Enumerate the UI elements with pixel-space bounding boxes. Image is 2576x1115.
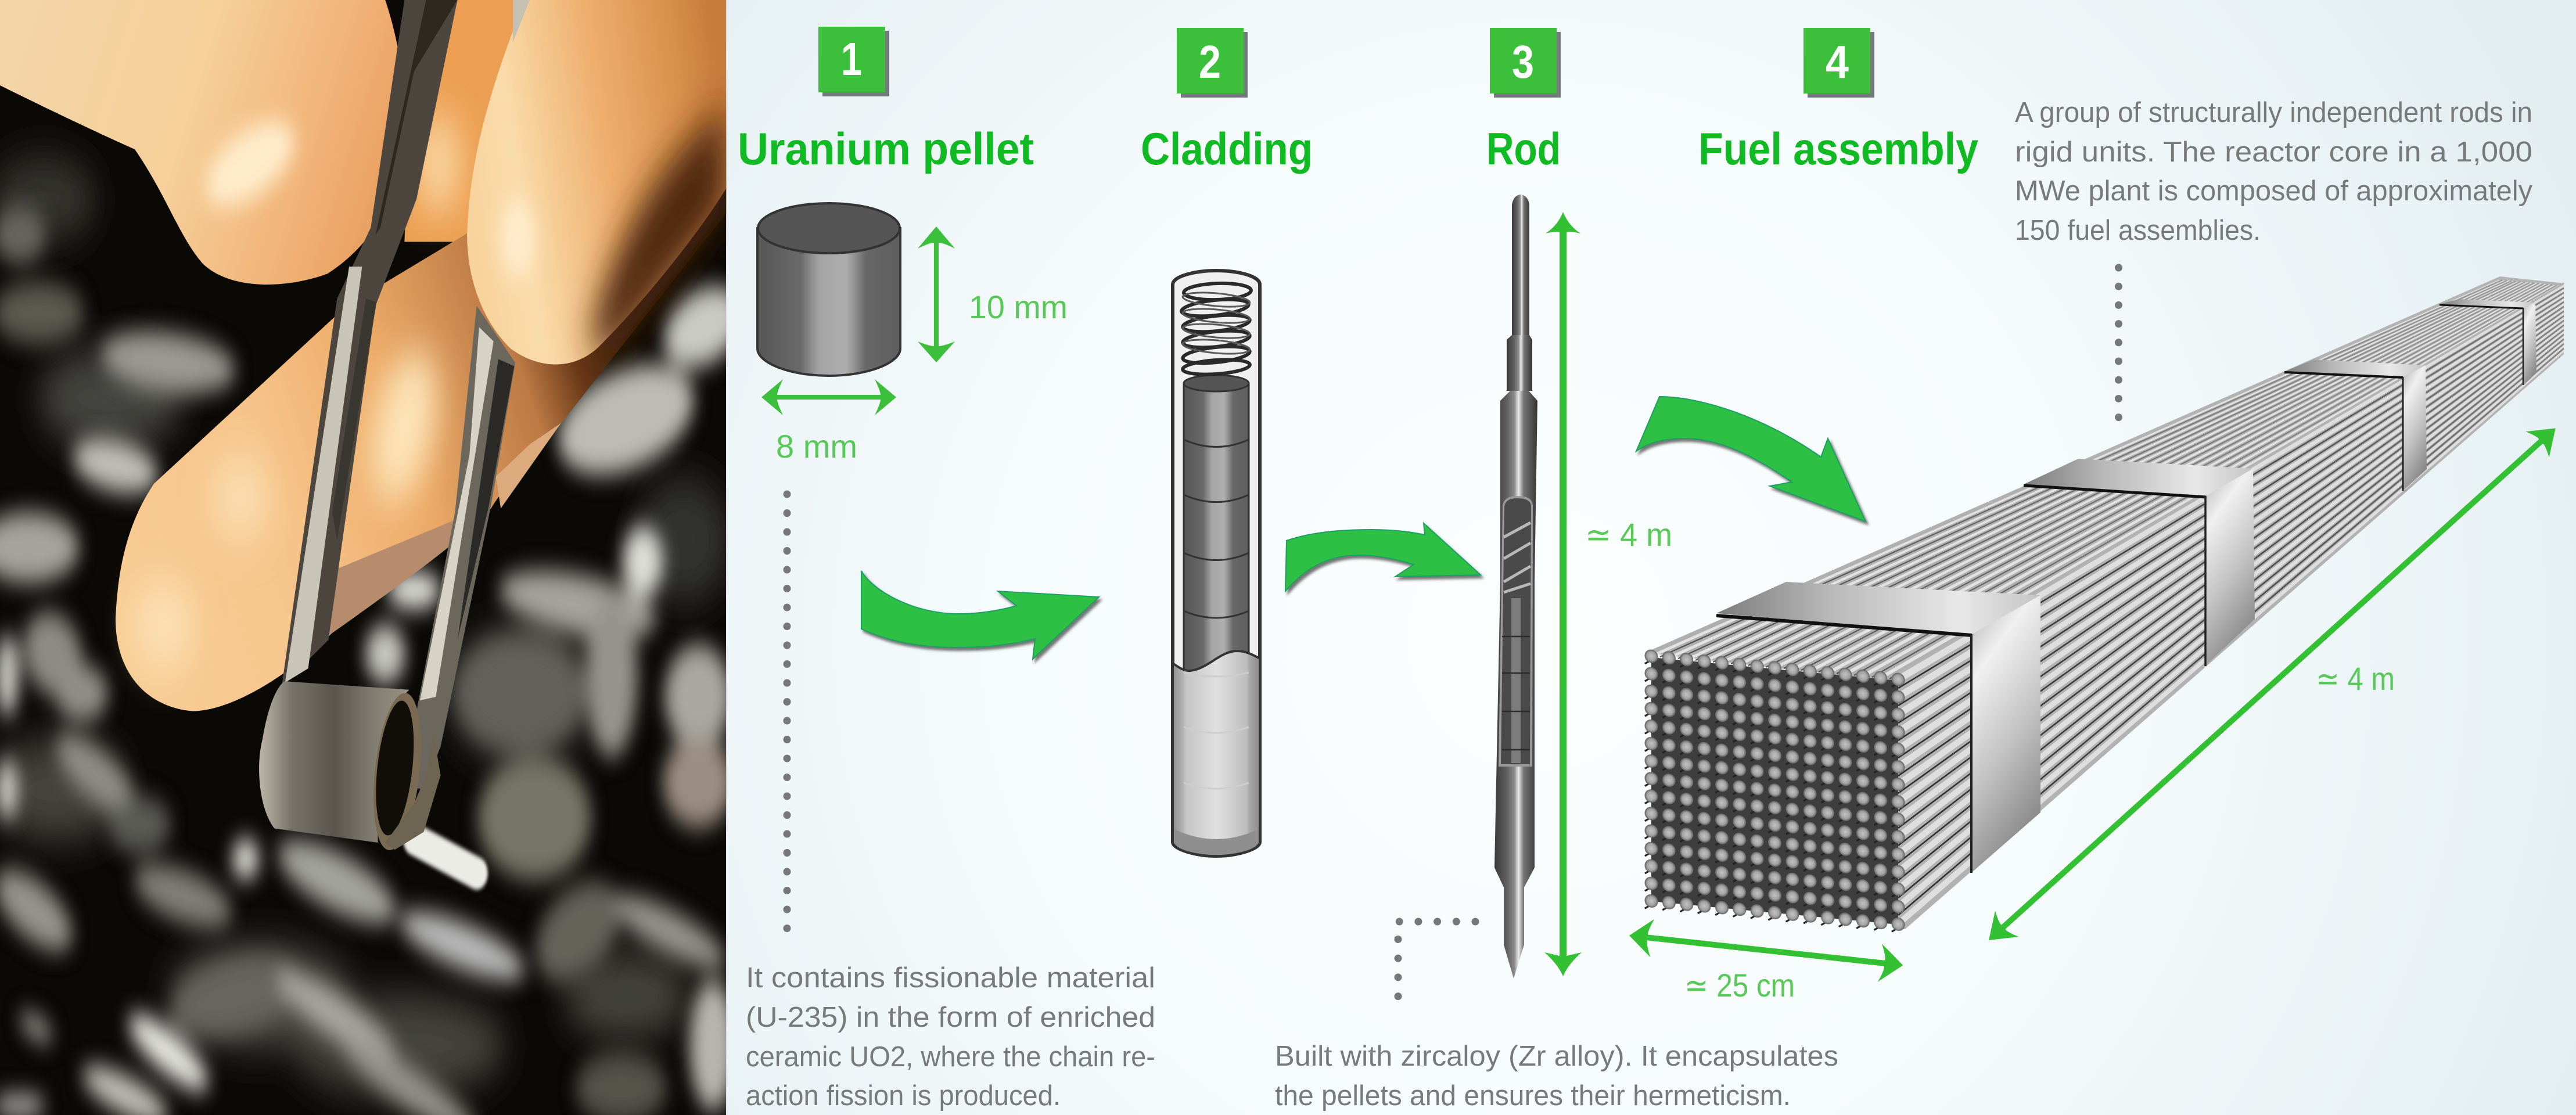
text: assembly description [2015,97,2532,246]
text: pellet description [746,962,1155,1112]
text: pellet description: ceramic UO2, where the chain re- [746,1041,1155,1073]
rods: top face [1645,276,2565,683]
text: assembly description: A group of structurally independent rods in [2015,97,2532,128]
text: cladding description [1275,1041,1838,1112]
heading: Uranium pellet: Uranium pellet [738,123,1034,174]
dotted leader: cladding description [1398,922,1475,1015]
step badge 2: 2 [1199,36,1221,88]
step badge 4: 4 [1826,36,1849,88]
text: assembly description: rigid units. The reactor core in a 1,000 [2015,136,2532,168]
text: assembly description: MWe plant is composed of approximately [2015,175,2532,207]
text: cladding description: Built with zircaloy (Zr alloy). It encapsulates [1275,1041,1838,1072]
step badge 1: 1 [841,33,862,85]
heading: Rod: Rod [1486,123,1561,174]
label: 10 mm: 10 mm [969,289,1068,325]
arrow: rod to fuel assembly [1636,397,1866,521]
spacer grid 3 [2284,359,2427,491]
rods: side face [1898,282,2564,929]
label: assembly width: ≃ 25 cm [1684,967,1795,1003]
spacer grid 1 [1716,582,2040,873]
label: rod length: ≃ 4 m [1585,516,1672,553]
step badge 2 [1177,28,1248,98]
spacer grid 4 [2440,299,2537,385]
arrow: cladding to rod [1285,523,1481,591]
arrow: rod length [1544,212,1582,976]
arrow: pellet diameter [761,379,896,415]
arrow: pellet to cladding [861,571,1099,659]
dotted leader: assembly description [2115,268,2122,419]
text: pellet description: (U-235) in the form of enriched [746,1002,1155,1033]
step badge 4 [1803,28,1874,98]
text: assembly description: 150 fuel assemblies. [2015,215,2261,246]
illustration: fuel rod [1494,195,1537,979]
text: pellet description: action fission is produced. [746,1080,1061,1112]
step badge 1 [818,27,889,96]
label: assembly length: ≃ 4 m [2316,660,2395,697]
step badge 3: 3 [1512,36,1534,88]
dotted leader: pellet [783,494,791,929]
text: cladding description: the pellets and ensures their hermeticism. [1275,1080,1791,1112]
step badge 3 [1490,28,1561,98]
arrow: pellet height [918,226,955,362]
spacer grid 2 [2024,459,2255,666]
label: 8 mm: 8 mm [776,428,857,465]
heading: Cladding: Cladding [1141,123,1313,174]
rods: front face grid of rod ends [1643,647,1907,934]
photo: fuel pellet held in tweezers [0,0,750,1115]
arrow: assembly length [1977,415,2567,953]
text: pellet description: It contains fissionable material [746,962,1155,994]
icon: uranium pellet cylinder [757,203,900,376]
heading: Fuel assembly: Fuel assembly [1698,123,1978,174]
illustration: cladding tube with spring and pellets [1173,271,1260,856]
arrow: assembly width [1627,916,1905,984]
illustration: fuel assembly [1643,276,2565,934]
